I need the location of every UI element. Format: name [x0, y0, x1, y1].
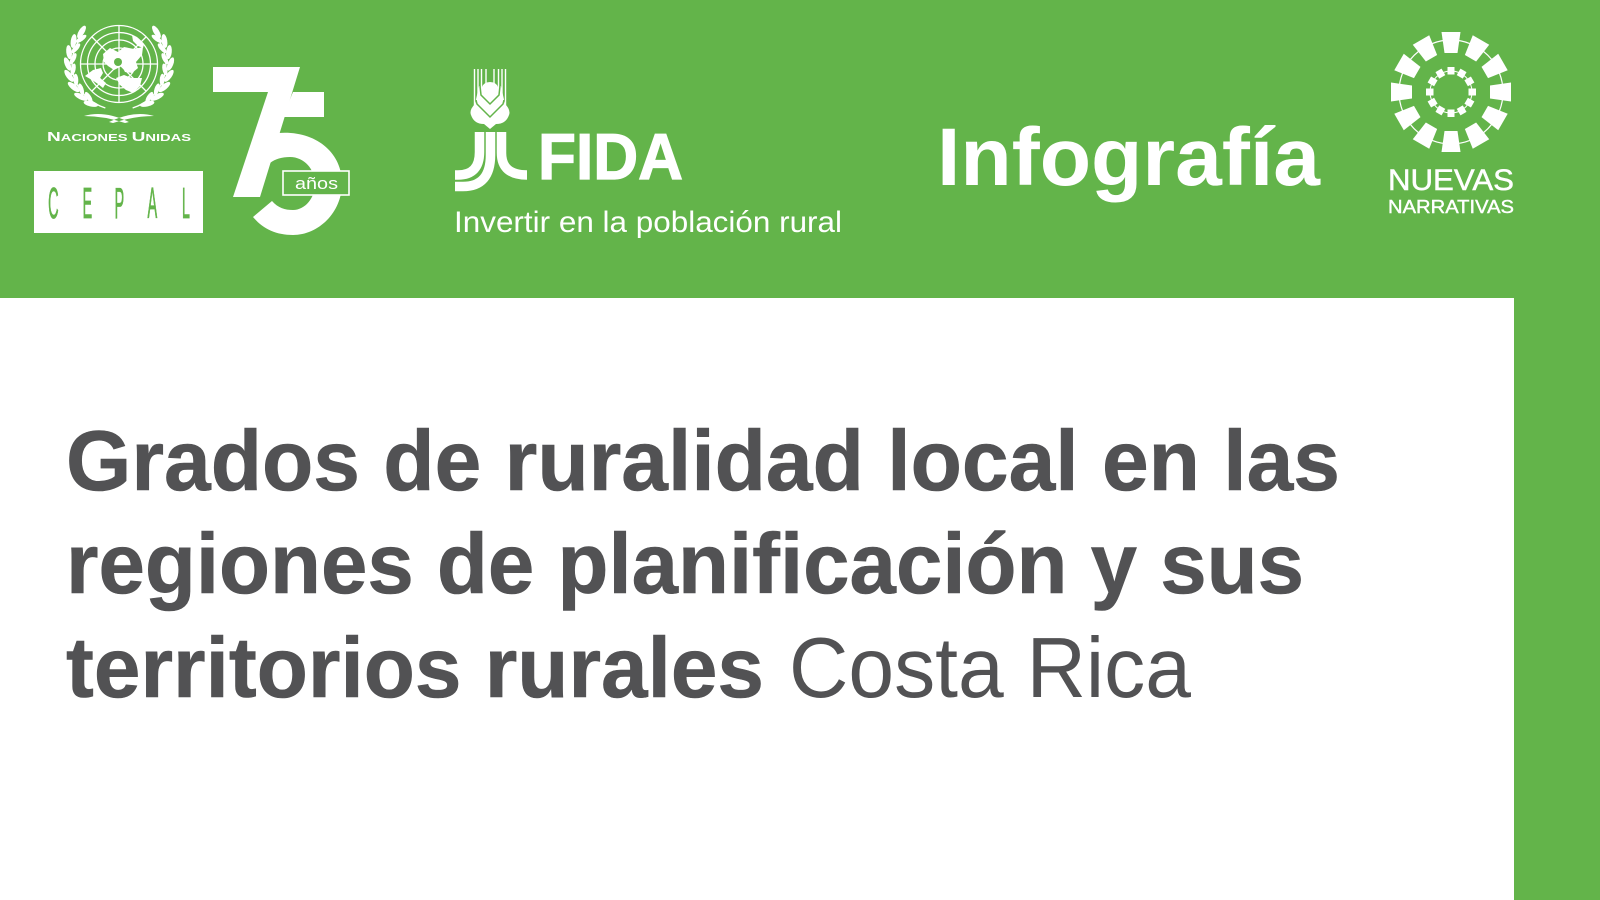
label: años: años — [295, 174, 338, 193]
logo: FIDA — [454, 69, 842, 239]
text: Naciones Unidas: N ACIONES U NIDAS — [47, 129, 191, 144]
heading: Infografía: Infografía — [937, 112, 1321, 203]
icon: stylised JJL — [455, 132, 527, 186]
wordmark: FIDA: FIDA — [538, 120, 683, 193]
title line 2: regiones de planificación y sus — [66, 517, 1304, 612]
title — [66, 414, 1340, 716]
title line 3 — [66, 621, 1192, 716]
tagline: Invertir en la población rural — [454, 206, 842, 239]
icon: wheat — [470, 69, 510, 129]
crossed sprigs — [84, 114, 154, 123]
wordmark: Narrativas: NARRATIVAS — [1388, 197, 1514, 217]
logo: CEPAL box: CEPAL — [48, 178, 190, 227]
logo: Nuevas Narrativas — [1388, 32, 1514, 217]
title line 1: Grados de ruralidad local en las — [66, 414, 1340, 509]
logo: Naciones Unidas emblem — [62, 24, 176, 123]
title line 3: Costa Rica — [789, 621, 1192, 716]
logo: 75 años — [213, 67, 349, 235]
label: años — [283, 171, 349, 195]
wreath left — [62, 24, 105, 108]
icon: segmented circle — [1391, 32, 1511, 152]
five — [253, 92, 342, 235]
logo: CEPAL box — [34, 171, 203, 233]
wordmark: Nuevas: NUEVAS — [1388, 164, 1514, 197]
wreath right — [133, 24, 176, 108]
white content panel — [0, 298, 1514, 900]
seven — [213, 67, 300, 197]
title line 3: territorios rurales — [66, 621, 764, 716]
